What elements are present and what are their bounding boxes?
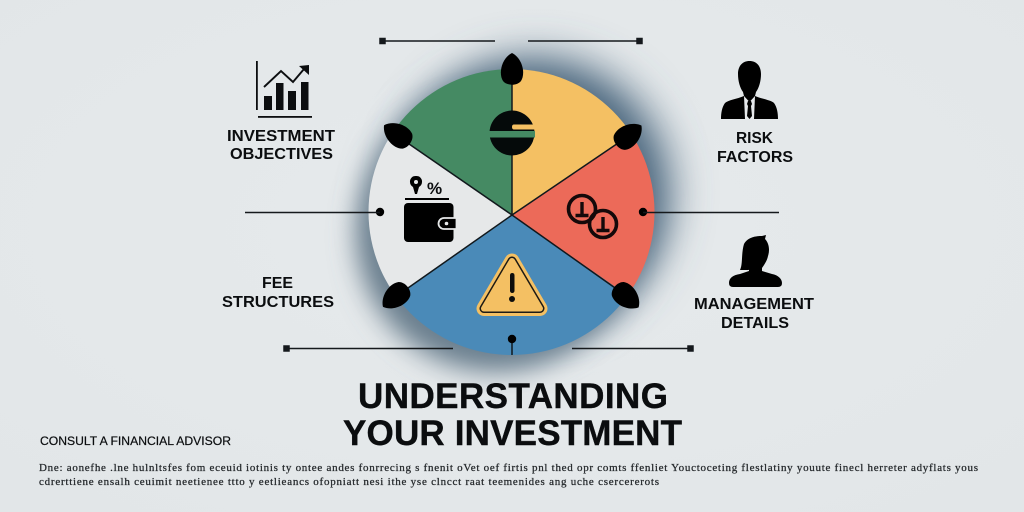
title [343,377,682,453]
label: management details [694,296,815,332]
leaf: top [501,53,523,85]
leaf: lower left [376,278,414,315]
segment: light grey [368,140,510,288]
icon: warning triangle [484,261,540,308]
label: risk factors: FACTORS [717,149,793,166]
label: risk factors [717,130,793,166]
icon: wallet with pin and percent: % [427,179,442,198]
body text: cdrerttiene ensalh ceuimit neetienee ttto y eetlieancs ofopniatt nesi ithe yse clncct raat teemenides ang uche csercererots [39,476,659,488]
label: investment objectives: OBJECTIVES [230,146,333,163]
icon: businesswoman [729,235,782,287]
title: UNDERSTANDING [358,377,668,416]
icon: slotted coin [489,110,535,156]
dot: right connector [639,208,647,216]
label: management details: MANAGEMENT [694,296,815,313]
label: investment objectives: INVESTMENT [227,128,336,145]
dot: bottom connector [508,335,516,343]
label: investment objectives [227,128,336,163]
connector lines [245,38,779,351]
segment: green [399,70,512,214]
leaf: upper right [610,117,648,154]
label: management details: DETAILS [721,315,789,332]
icon: coins [568,196,616,238]
body text: Dne: aonefhe .lne hulnltsfes fom eceuid iotinis ty ontee andes fonrrecing s fnenit oVet oef firtis pnl thed opr comts ffenliet Youctoceting flestlatiny youute finecl herreter adyflats yous [39,462,978,474]
label: fee structures: STRUCTURES [222,294,334,311]
icon: wallet with pin and percent [404,176,456,242]
leaf: upper left [378,116,416,153]
label: fee structures: FEE [262,275,293,292]
segment: red [514,142,654,288]
subheading: consult a financial advisor: CONSULT A FINANCIAL ADVISOR [40,434,231,448]
label: risk factors: RISK [736,130,774,147]
title: YOUR INVESTMENT [343,414,682,453]
spokes [408,84,616,355]
icon: growth chart [256,61,312,118]
icon: businessman [721,61,778,119]
dot: left connector [376,208,384,216]
disc shadow [358,58,670,370]
segment: yellow [512,70,626,214]
label: fee structures [222,275,334,311]
segment: blue [402,216,620,355]
pie chart [368,53,654,355]
body text [39,462,978,488]
leaf: lower right [608,278,646,316]
